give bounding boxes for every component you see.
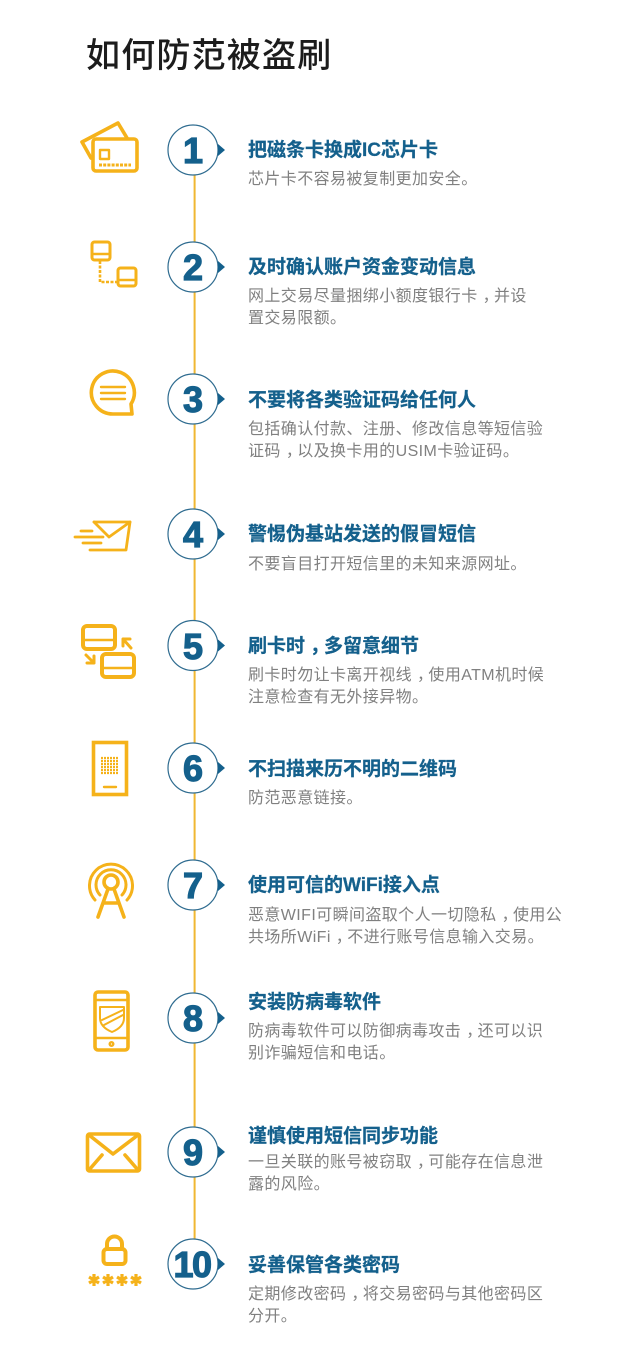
icon: flying envelope [75, 522, 130, 550]
number badge 6: 6 [183, 748, 203, 789]
step 4 [75, 509, 527, 573]
number badge 8 [168, 993, 225, 1043]
step 2 text: 置交易限额。 [248, 309, 346, 327]
step 8 heading: 安装防病毒软件 [248, 990, 381, 1013]
icon: chat bubble [91, 371, 134, 414]
step 9 [88, 1125, 543, 1193]
step 7 text: 恶意WIFI可瞬间盗取个人一切隐私 ，使用公 [248, 905, 562, 924]
step 8 [95, 990, 543, 1062]
step 6 [94, 742, 457, 807]
number badge 8: 8 [183, 998, 203, 1039]
step 8 text: 防病毒软件可以防御病毒攻击 ，还可以识 [248, 1022, 543, 1040]
number badge 1: 1 [183, 130, 203, 171]
number badge 3 [168, 374, 225, 424]
number badge 7: 7 [183, 865, 203, 906]
step 1 [82, 123, 478, 188]
step 8 text [248, 1022, 543, 1062]
step 5 heading: 刷卡时 ，多留意细节 [248, 634, 419, 657]
step 5 [83, 620, 544, 706]
step 6 heading: 不扫描来历不明的二维码 [248, 758, 457, 780]
number badge 7 [168, 860, 225, 910]
number badge 3: 3 [183, 379, 203, 420]
number badge 4 [168, 509, 225, 559]
step 3 heading: 不要将各类验证码给任何人 [248, 388, 476, 411]
timeline line [194, 150, 196, 1264]
step 3 text [248, 420, 543, 460]
icon: phone with QR code [94, 742, 126, 794]
number badge 5: 5 [183, 626, 203, 667]
number badge 4: 4 [183, 514, 203, 555]
step 2 heading: 及时确认账户资金变动信息 [248, 255, 476, 278]
title: 如何防范被盗刷 [86, 37, 332, 75]
step 9 text: 一旦关联的账号被窃取 ，可能存在信息泄 [248, 1153, 543, 1171]
step 3 text: 证码 ，以及换卡用的USIM卡验证码。 [248, 442, 519, 460]
step 2 text [248, 287, 527, 327]
step 5 text: 刷卡时勿让卡离开视线 ，使用ATM机时候 [248, 666, 544, 684]
step 4 heading: 警惕伪基站发送的假冒短信 [248, 522, 476, 545]
step 7 heading: 使用可信的WiFi接入点 [248, 874, 440, 896]
icon: wifi tower [89, 864, 132, 917]
icon: lock and password [89, 1236, 141, 1286]
number badge 10: 10 [173, 1244, 211, 1285]
step 7 text [248, 905, 562, 946]
step 10 heading: 妥善保管各类密码 [248, 1253, 400, 1276]
step 10 text [248, 1285, 543, 1325]
step 1 heading: 把磁条卡换成IC芯片卡 [248, 138, 438, 161]
number badge 1 [168, 125, 225, 175]
icon: linked accounts [92, 242, 136, 286]
step 4 text: 不要盲目打开短信里的未知来源网址。 [248, 555, 527, 573]
number badge 9: 9 [183, 1132, 203, 1173]
step 9 heading: 谨慎使用短信同步功能 [248, 1125, 438, 1147]
icon: phone with shield [95, 992, 128, 1050]
step 10 text: 定期修改密码 ，将交易密码与其他密码区 [248, 1285, 543, 1303]
icon: card swap [83, 626, 134, 677]
step 10 text: 分开。 [248, 1307, 297, 1325]
step 9 text: 露的风险。 [248, 1175, 330, 1193]
step 10 [89, 1236, 543, 1325]
step 7 [89, 860, 562, 946]
number badge 2: 2 [183, 247, 203, 288]
step 9 text [248, 1153, 543, 1193]
step 2 [92, 242, 527, 327]
step 5 text: 注意检查有无外接异物。 [248, 687, 428, 706]
step 2 text: 网上交易尽量捆绑小额度银行卡 ，并设 [248, 287, 527, 305]
number badge 9 [168, 1127, 225, 1177]
step 3 [91, 371, 543, 460]
number badge 2 [168, 242, 225, 292]
number badge 10 [168, 1239, 225, 1289]
icon: bank cards [82, 123, 137, 171]
step 7 text: 共场所WiFi ，不进行账号信息输入交易。 [248, 928, 544, 946]
step 8 text: 别诈骗短信和电话。 [248, 1044, 396, 1062]
step 5 text [248, 666, 544, 706]
step 1 text: 芯片卡不容易被复制更加安全。 [248, 170, 478, 188]
icon: envelope [88, 1134, 140, 1171]
step 6 text: 防范恶意链接。 [248, 788, 363, 807]
number badge 5 [168, 620, 225, 670]
number badge 6 [168, 743, 225, 793]
step 3 text: 包括确认付款、注册、修改信息等短信验 [248, 420, 543, 438]
